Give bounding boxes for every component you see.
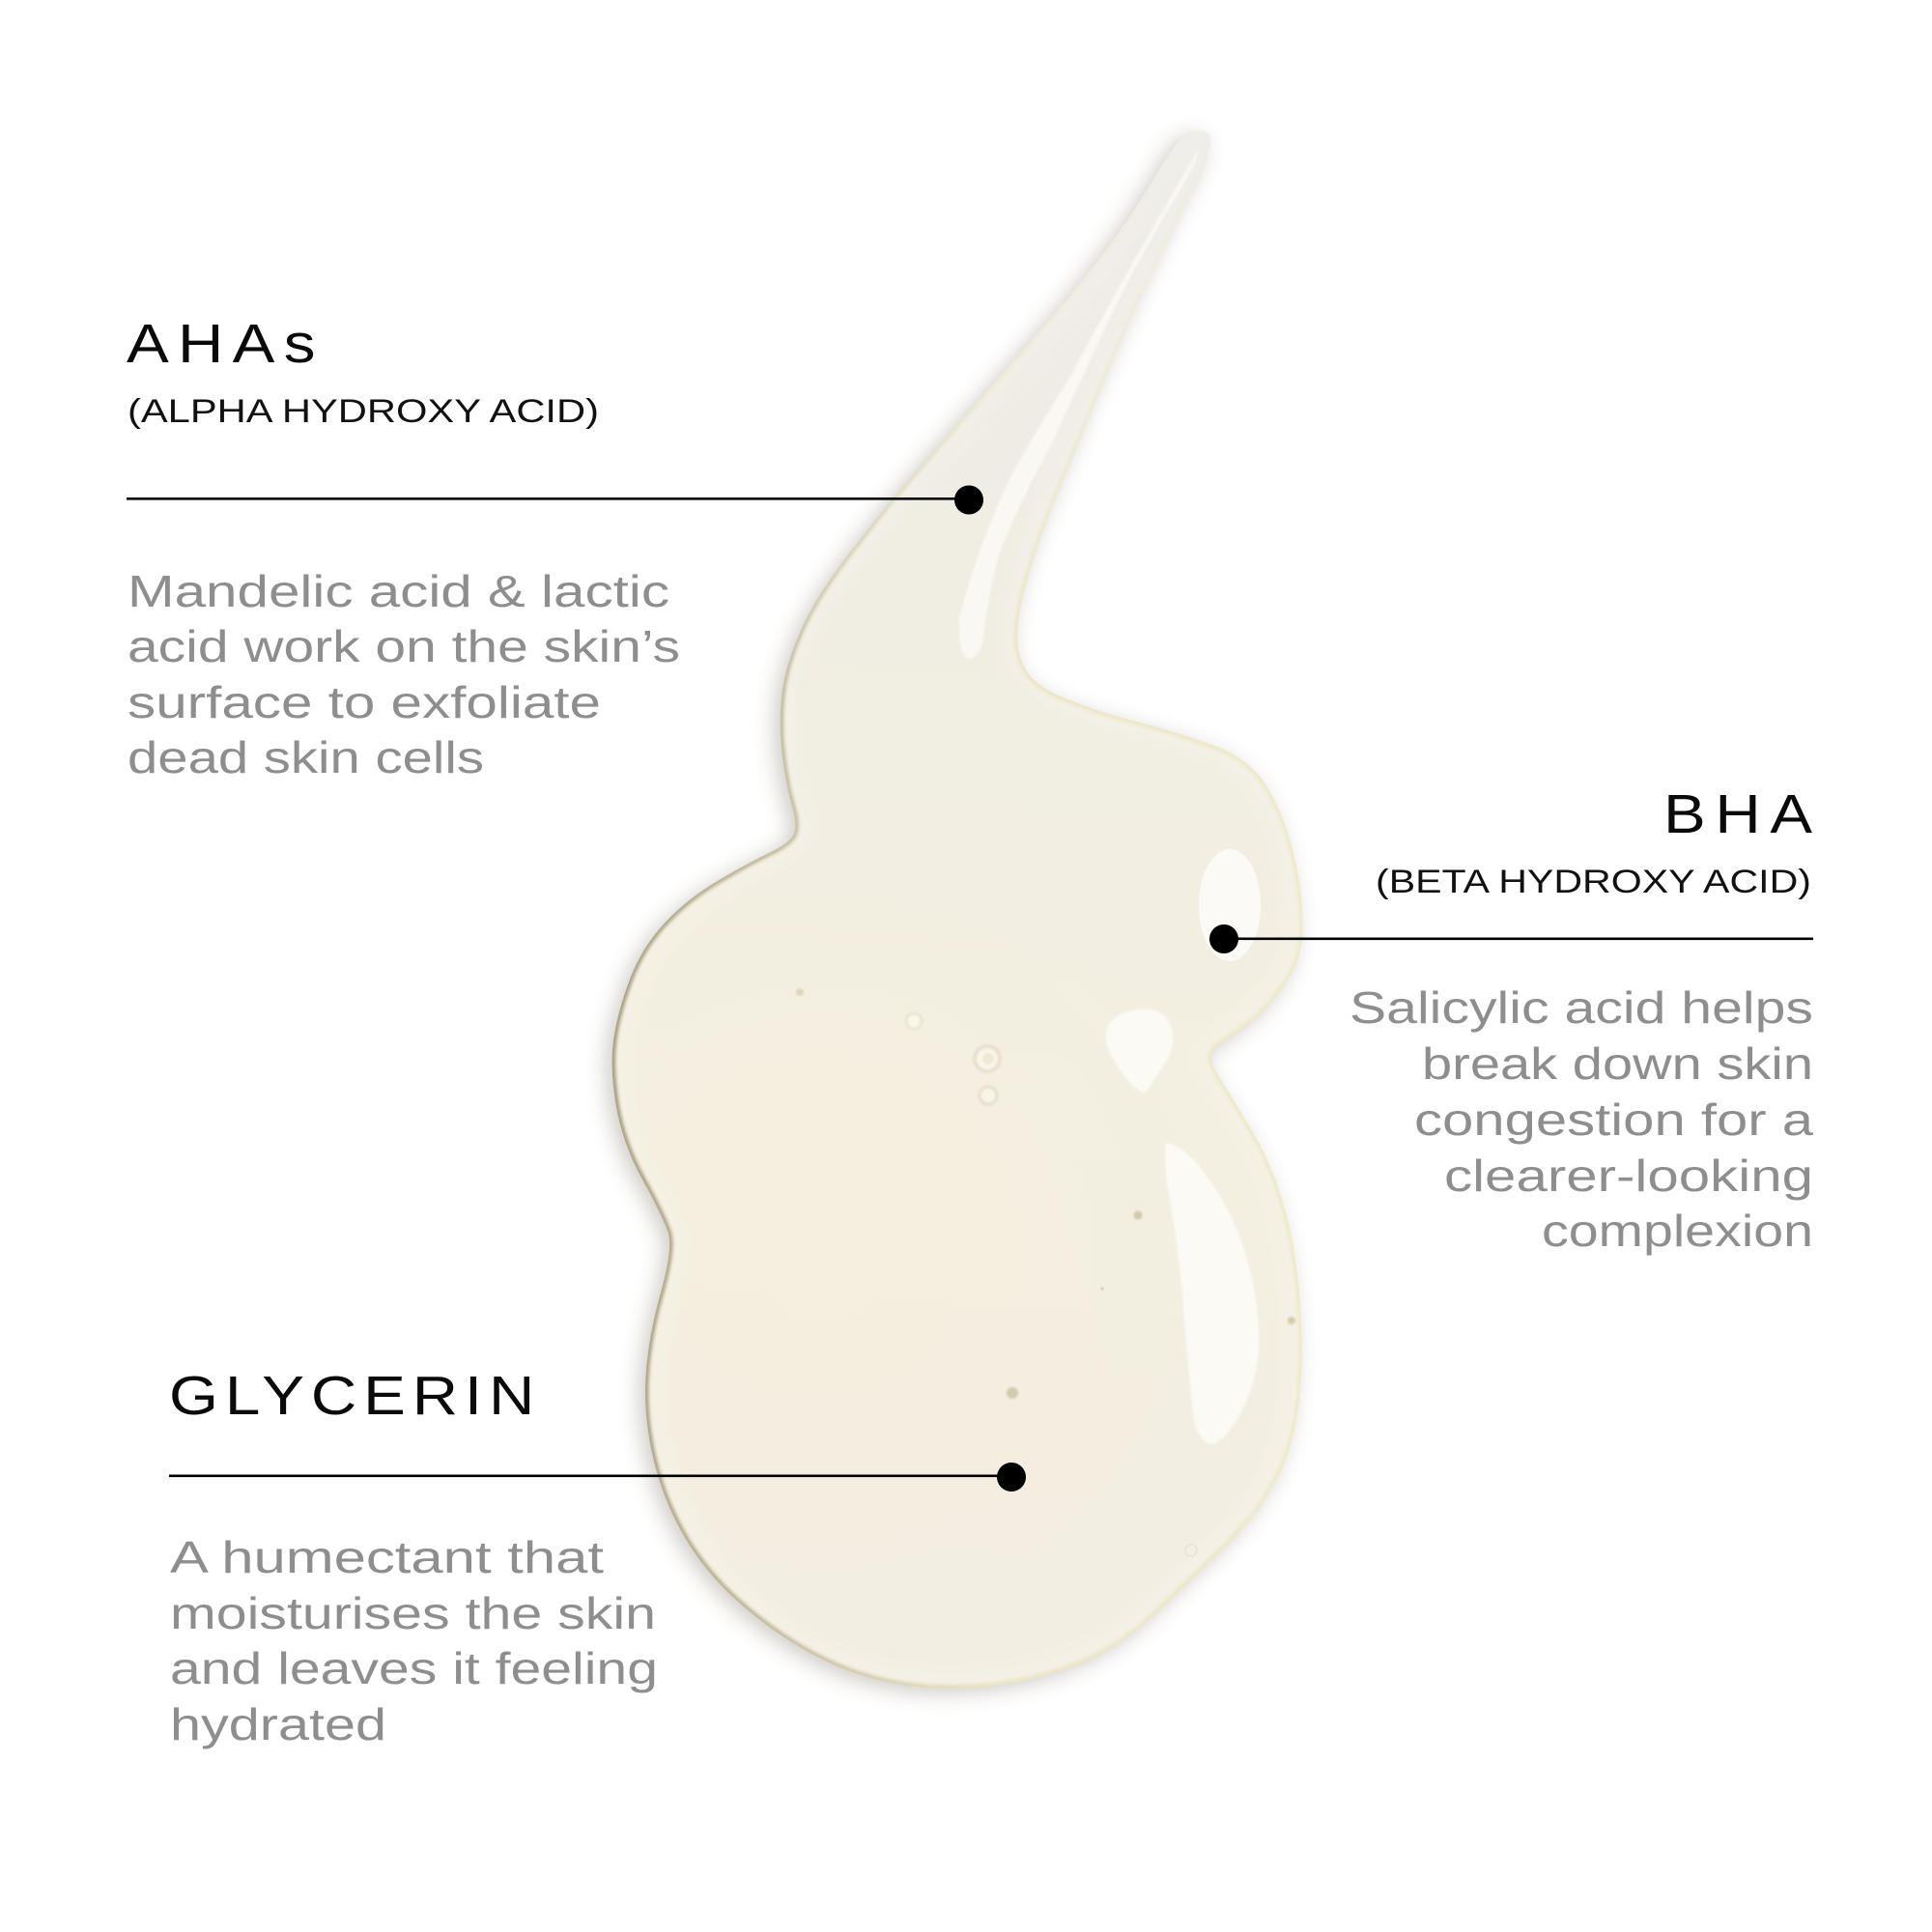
highlight: teardrop — [1106, 1009, 1173, 1094]
heading: AHAs: AHAs — [127, 313, 315, 375]
subheading: alpha hydroxy acid: (ALPHA HYDROXY ACID) — [128, 393, 599, 430]
description: BHA — [1350, 982, 1814, 1256]
description: AHAs: acid work on the skin’s — [128, 621, 680, 671]
swatch body — [612, 130, 1303, 1689]
bubbles and specks — [796, 988, 1295, 1556]
highlight: large crescent — [1165, 1143, 1259, 1444]
highlight: tail streak — [959, 151, 1198, 659]
description: BHA: complexion — [1542, 1206, 1813, 1256]
description: AHAs: dead skin cells — [128, 732, 484, 782]
description: BHA: break down skin — [1422, 1038, 1813, 1089]
callout: AHAs — [127, 313, 983, 782]
description: AHAs: surface to exfoliate — [128, 677, 601, 727]
heading: BHA: BHA — [1663, 783, 1812, 845]
serum swatch — [607, 130, 1303, 1693]
description: BHA: Salicylic acid helps — [1350, 982, 1813, 1033]
callout: BHA — [1209, 783, 1814, 1256]
description: BHA: congestion for a — [1414, 1094, 1814, 1145]
description: Glycerin: moisturises the skin — [170, 1588, 656, 1638]
callout: Glycerin — [169, 1365, 1026, 1749]
description: AHAs: Mandelic acid & lactic — [128, 566, 669, 616]
highlight: upper oval — [1199, 849, 1261, 961]
subheading: beta hydroxy acid: (BETA HYDROXY ACID) — [1376, 864, 1811, 900]
heading: Glycerin: GLYCERIN — [169, 1365, 534, 1427]
description: AHAs — [128, 566, 680, 782]
description: BHA: clearer-looking — [1444, 1151, 1813, 1201]
description: Glycerin: and leaves it feeling — [170, 1643, 658, 1693]
leader line and dot — [169, 1463, 1026, 1492]
leader line and dot — [127, 485, 983, 514]
swatch shadow — [607, 135, 1297, 1693]
description: Glycerin: A humectant that — [170, 1532, 604, 1582]
description: Glycerin: hydrated — [170, 1699, 386, 1749]
description: Glycerin — [170, 1532, 658, 1749]
leader line and dot — [1209, 924, 1813, 953]
